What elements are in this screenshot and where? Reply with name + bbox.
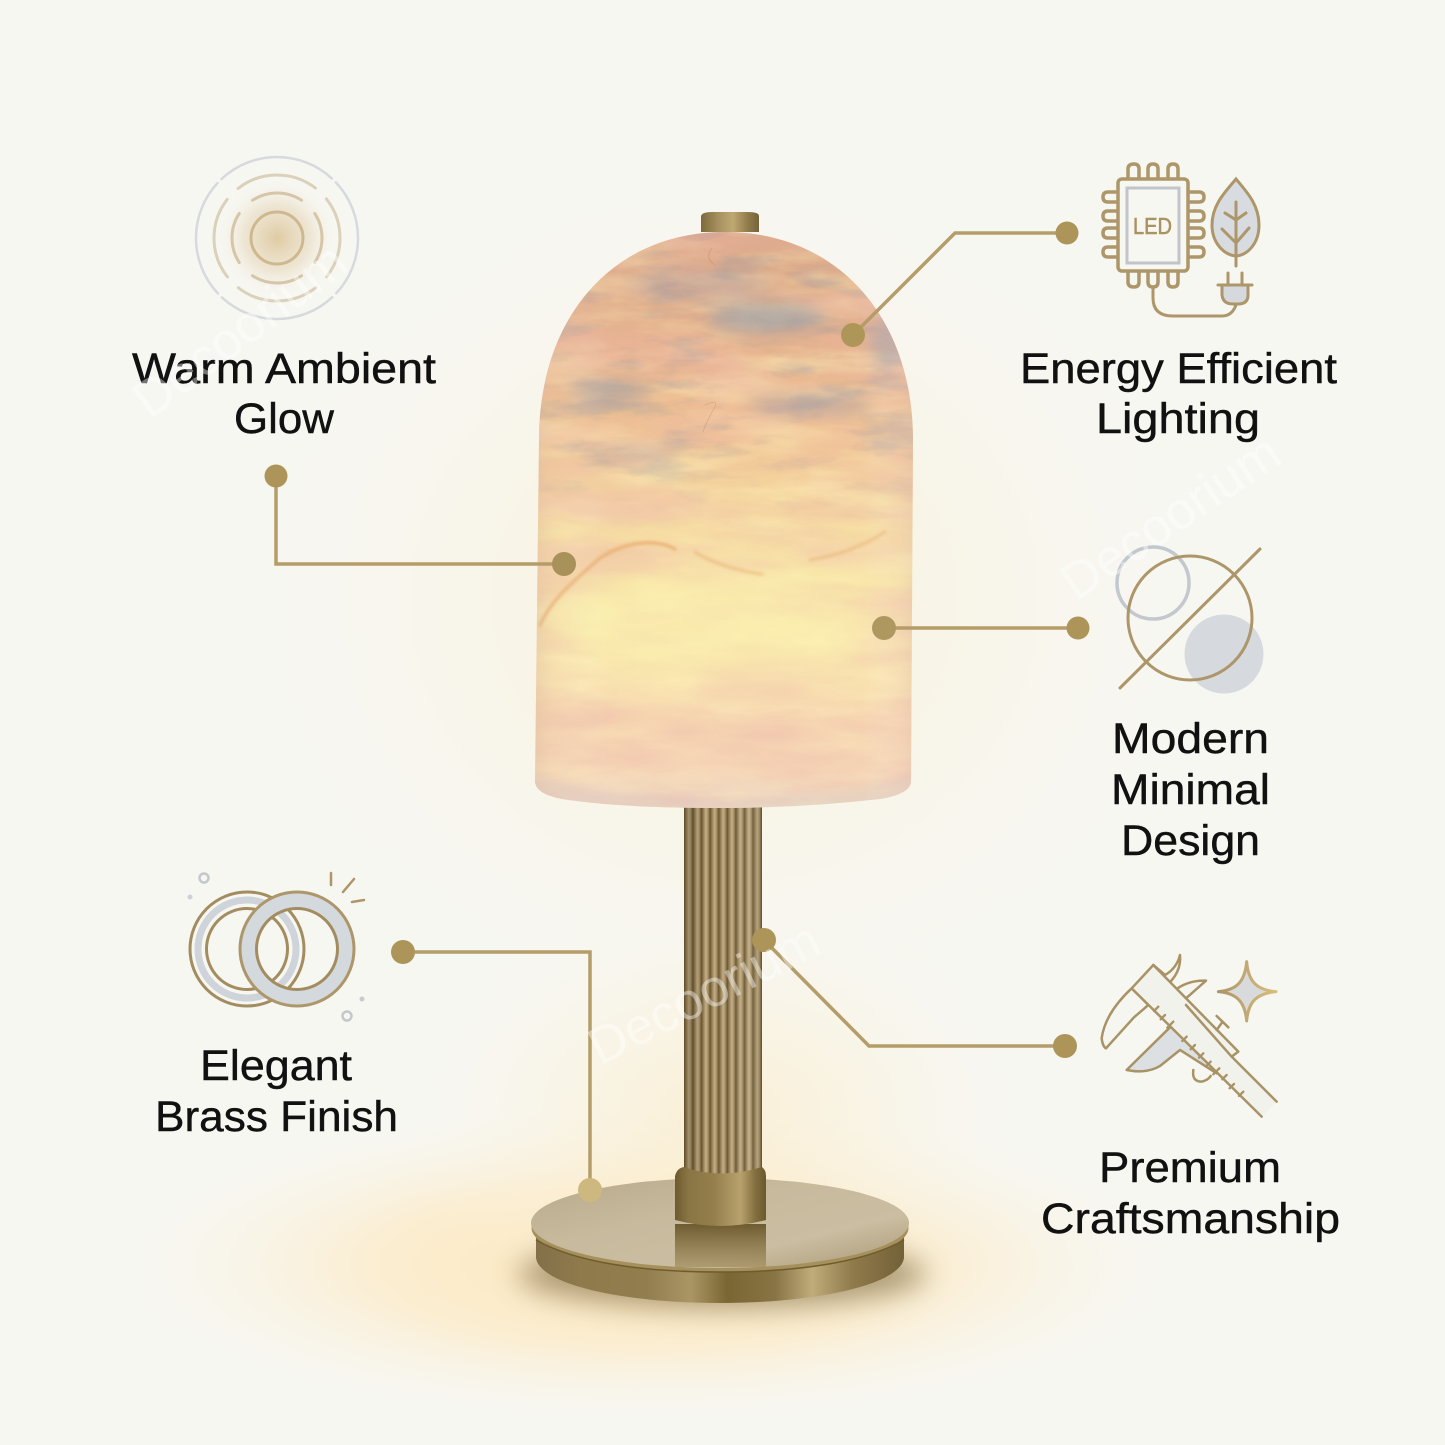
brass collar	[675, 1167, 766, 1226]
label: elegant brass finish: Elegant	[200, 1042, 352, 1090]
blue grey marble clouds	[570, 271, 910, 463]
callout: modern minimal leader	[872, 616, 1090, 640]
label: modern minimal design: Minimal	[1111, 766, 1270, 814]
label: energy efficient lighting: Lighting	[1096, 395, 1260, 443]
label: elegant brass finish: Brass Finish	[155, 1093, 398, 1141]
chip pins	[1103, 164, 1204, 287]
label: energy efficient lighting: Energy Efficient	[1020, 345, 1337, 393]
icon: caliper and star	[1102, 955, 1277, 1117]
stem glow	[390, 900, 1050, 1320]
leaf veins	[1222, 202, 1249, 266]
caliper	[1102, 955, 1277, 1117]
plug	[1218, 273, 1252, 304]
edge shading	[535, 336, 912, 787]
label: modern minimal design	[1111, 715, 1270, 865]
label: modern minimal design: Modern	[1112, 715, 1269, 763]
orange veins	[540, 248, 885, 625]
chip inner frame	[1127, 188, 1179, 263]
label: warm ambient glow: Glow	[234, 395, 335, 443]
label: warm ambient glow	[132, 345, 436, 443]
icon: minimal circles and diagonal	[1117, 547, 1264, 694]
callout: brass finish leader	[391, 940, 602, 1202]
label: premium craftsmanship: Premium	[1099, 1144, 1281, 1192]
lamp base shadow	[518, 1240, 926, 1308]
label: warm ambient glow: Warm Ambient	[132, 345, 436, 393]
brass cap	[701, 212, 759, 232]
icon: LED chip and leaf	[1103, 164, 1259, 316]
icon: interlocked brass rings	[188, 873, 364, 1020]
lamp	[518, 212, 926, 1308]
chip body	[1118, 179, 1188, 271]
label: premium craftsmanship	[1041, 1144, 1340, 1243]
pink bands	[570, 491, 905, 749]
label: elegant brass finish	[155, 1042, 398, 1141]
callout: warm ambient glow leader	[264, 464, 576, 576]
callout: energy efficient leader	[841, 222, 1078, 347]
star	[1218, 962, 1276, 1021]
label: premium craftsmanship: Craftsmanship	[1041, 1195, 1340, 1243]
fluted stem	[684, 806, 762, 1178]
icon: warm glow rings	[196, 157, 358, 319]
leaf	[1212, 179, 1259, 256]
warm centre light	[602, 566, 858, 676]
callout: craftsmanship leader	[752, 928, 1077, 1058]
warm halo around the lamp	[205, 130, 1245, 1070]
watermark: centre bottom: Decoorium	[579, 911, 829, 1077]
floor glow	[110, 1105, 1190, 1425]
alabaster shade	[530, 228, 920, 812]
sparkles	[331, 873, 364, 902]
label: modern minimal design: Design	[1121, 817, 1260, 865]
label: energy efficient lighting	[1020, 345, 1337, 443]
power cord	[1153, 287, 1236, 316]
watermark: right: Decoorium	[1050, 423, 1291, 612]
brass base	[531, 1178, 909, 1303]
LED label: LED	[1133, 213, 1172, 239]
watermark: top left: Decoorium	[122, 232, 358, 430]
